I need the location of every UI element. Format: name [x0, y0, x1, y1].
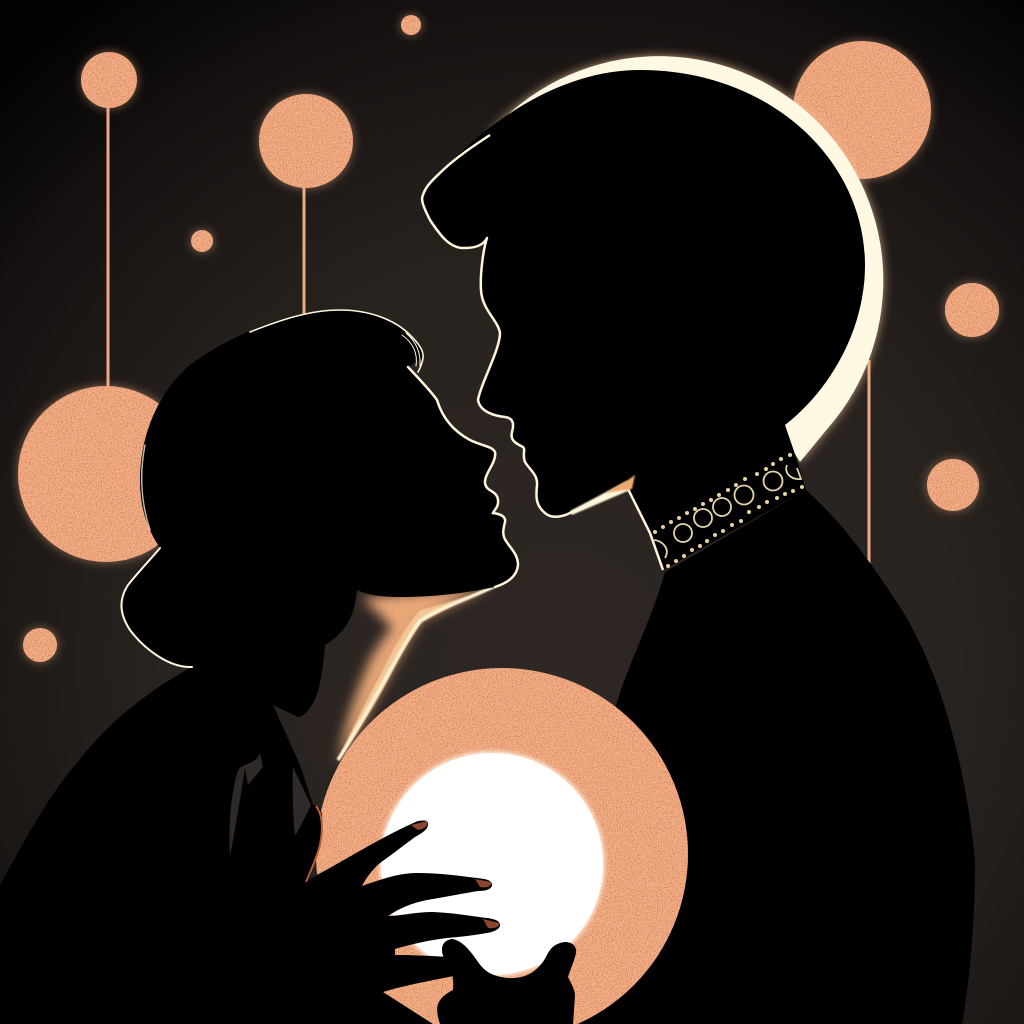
white glowing core — [379, 751, 605, 977]
man's head with profile — [422, 70, 865, 570]
collar dots — [653, 453, 804, 568]
woman's body and hand — [0, 668, 500, 1024]
light on woman's neck — [338, 586, 495, 765]
man's profile outline — [422, 135, 663, 570]
floating peach orbs — [18, 15, 999, 662]
man's body — [400, 490, 975, 1024]
fingernails — [411, 821, 499, 928]
halo blur behind man's head — [490, 56, 883, 462]
hanging strings — [108, 100, 869, 563]
man's hand — [437, 939, 576, 1024]
woman's head and hair — [121, 310, 518, 717]
cream halo crescent — [490, 56, 883, 462]
large peach orb — [316, 668, 688, 1024]
woman's profile outline — [121, 310, 518, 667]
thumb glow edge — [306, 806, 322, 882]
brown clothing folds on woman — [229, 753, 311, 856]
chin glow — [570, 475, 635, 515]
glow behind orbs — [18, 15, 999, 662]
collar rings — [654, 465, 801, 558]
jewelled collar — [653, 453, 804, 568]
